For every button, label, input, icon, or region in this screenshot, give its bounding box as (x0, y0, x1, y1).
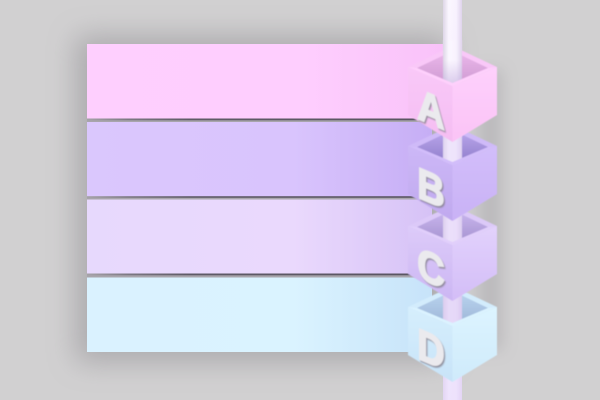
cube C (408, 199, 497, 301)
cube opening (408, 46, 497, 86)
left face (408, 67, 452, 142)
letter D: D (417, 319, 445, 380)
right face (452, 67, 497, 142)
letter A: A (417, 79, 445, 140)
cube opening (408, 125, 497, 165)
rod inside cube (443, 119, 462, 164)
panel shadow (76, 36, 448, 362)
left face (408, 146, 452, 221)
cube A (408, 40, 497, 142)
cube front rim (408, 307, 497, 326)
rod inside cube (443, 40, 462, 85)
cube front rim (408, 67, 497, 86)
panel: A (87, 44, 443, 118)
cube front rim (408, 146, 497, 165)
left face (408, 307, 452, 382)
panel: B (87, 122, 432, 196)
cube opening (408, 286, 497, 326)
right face (452, 146, 497, 221)
cube front rim (408, 226, 497, 245)
rod inside cube (443, 280, 462, 325)
cube D (408, 280, 497, 382)
letter B: B (417, 158, 445, 219)
letter C: C (417, 238, 445, 299)
left face (408, 226, 452, 301)
right face (452, 307, 497, 382)
cube opening (408, 205, 497, 245)
panel: C (87, 200, 432, 274)
right face (452, 226, 497, 301)
cube B (408, 119, 497, 221)
cube column shadow (478, 70, 502, 350)
vertical rod (443, 0, 462, 400)
panel: D (87, 278, 432, 352)
gap shading between panels (87, 117, 437, 279)
rod inside cube (443, 199, 462, 244)
